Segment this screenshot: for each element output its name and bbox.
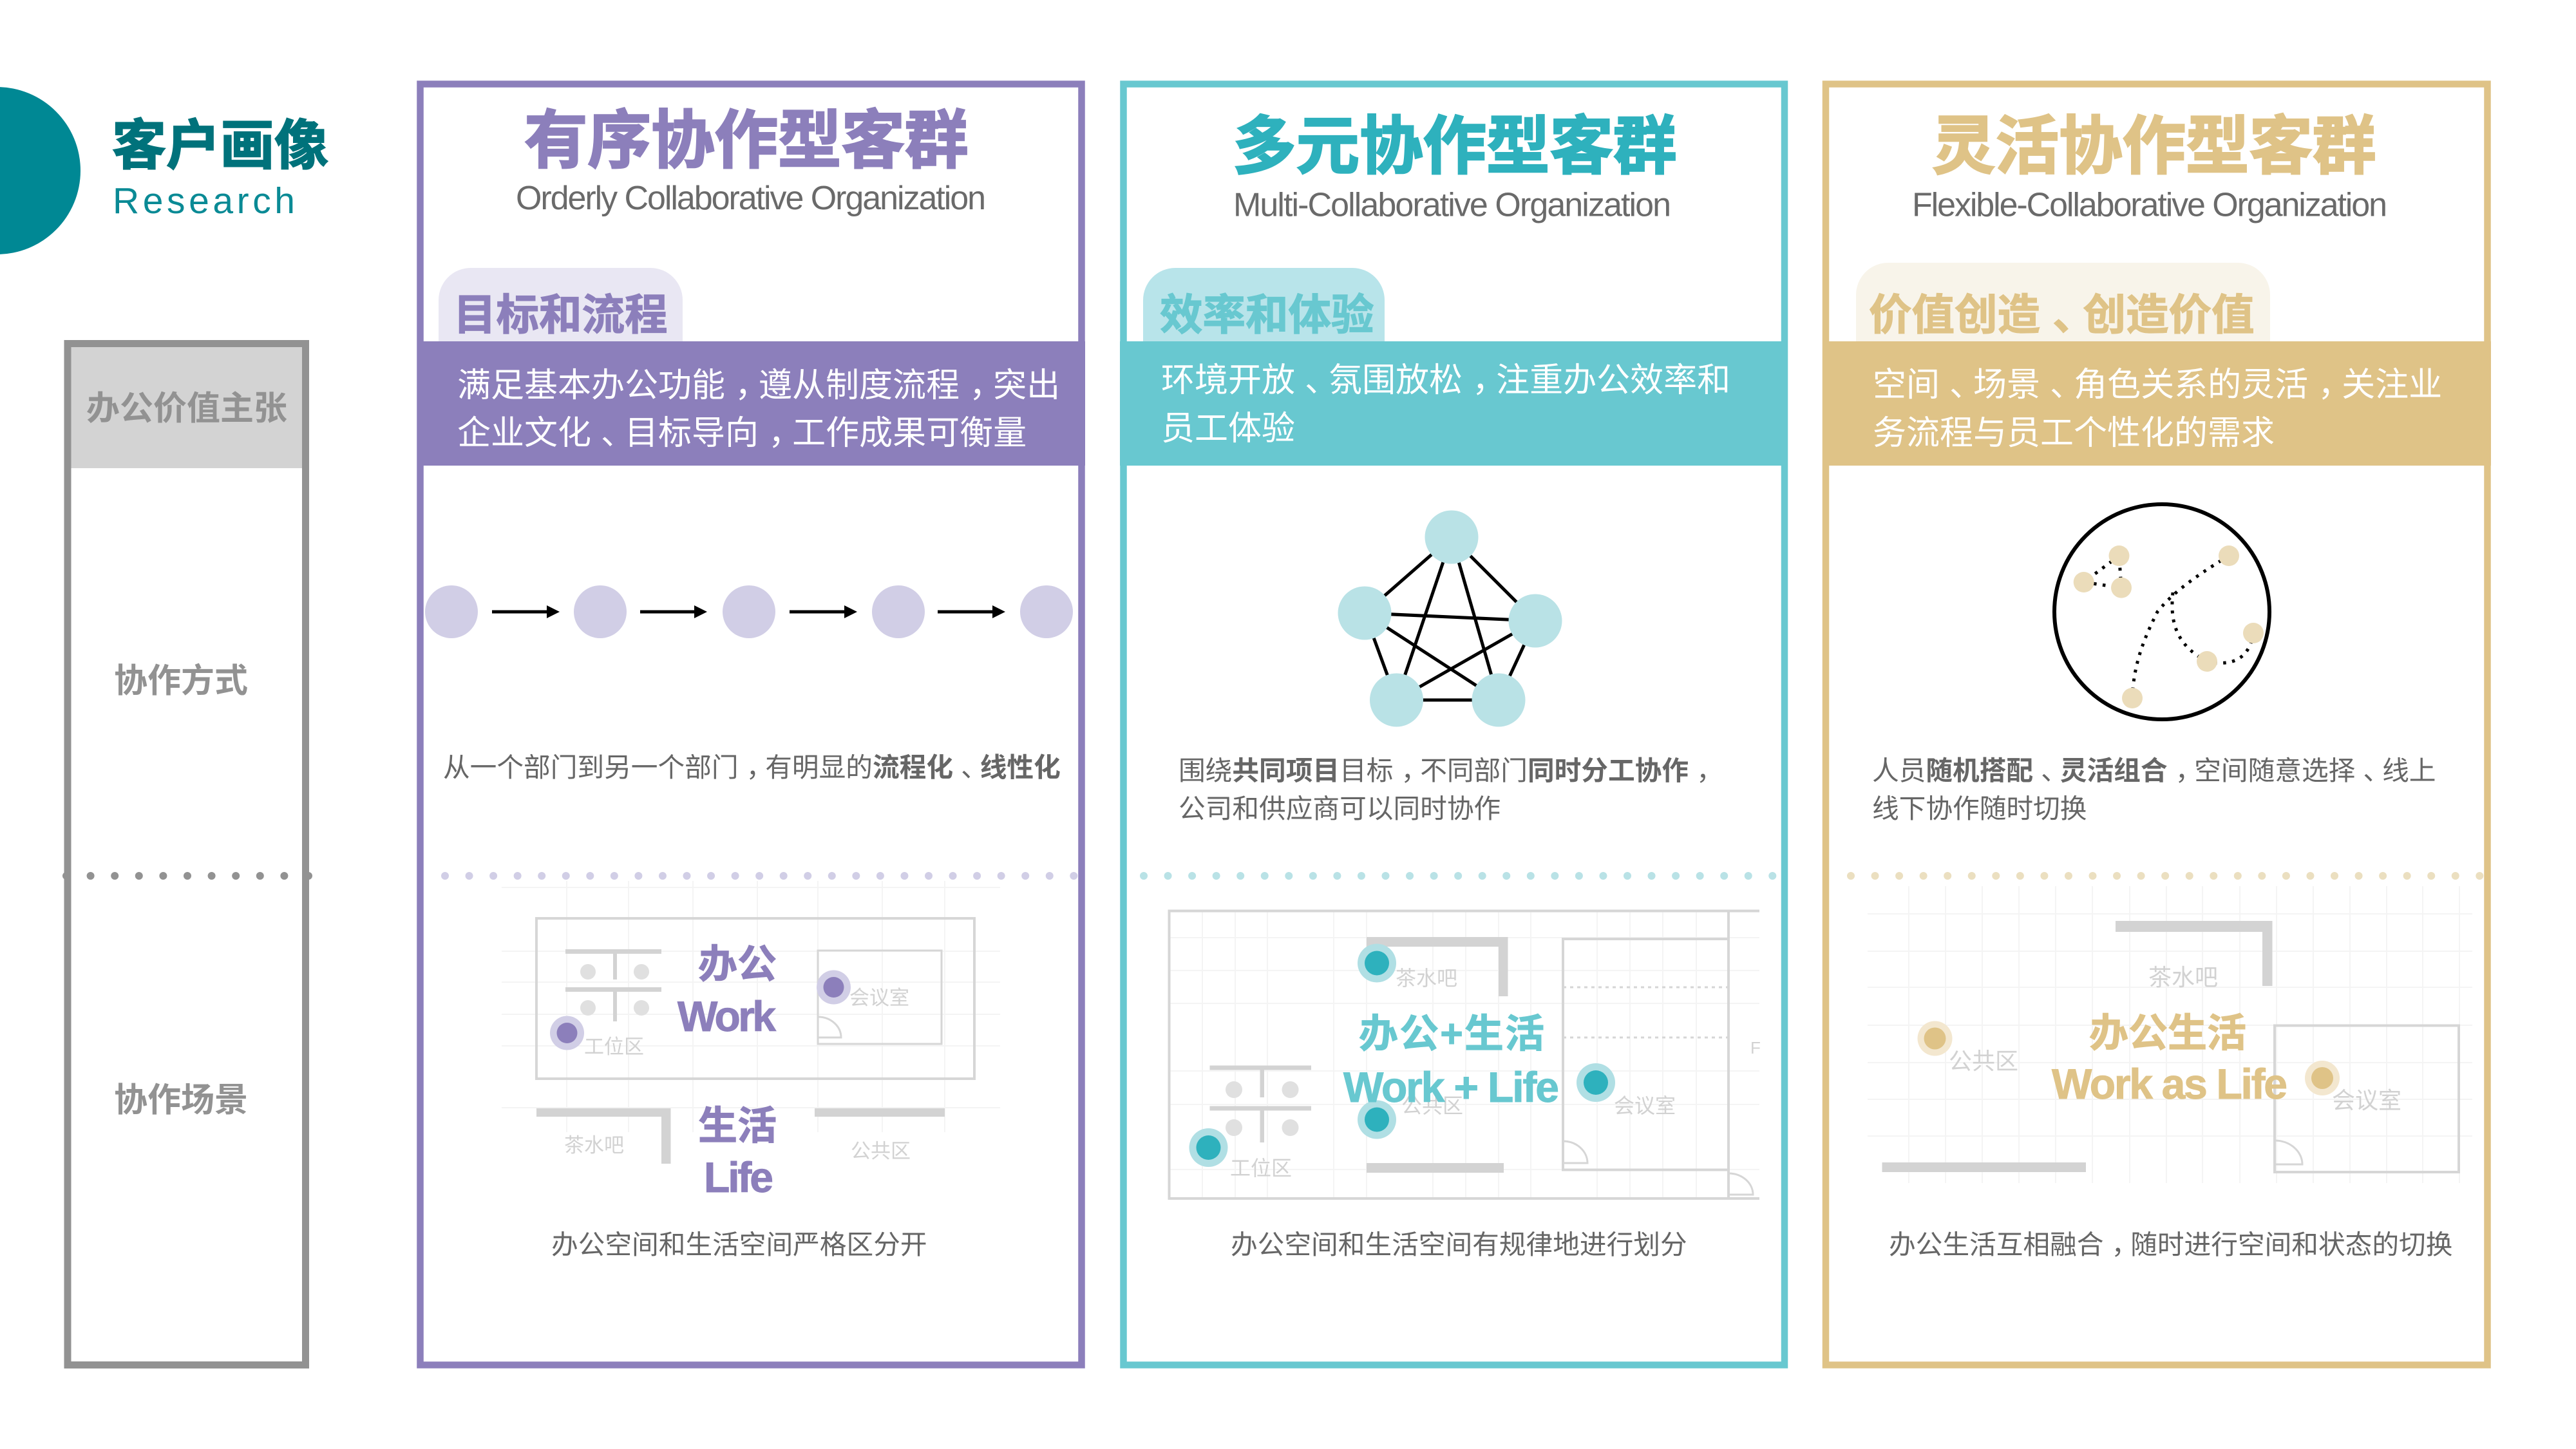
floor plan: separated work and life: 生活 [698,1104,777,1148]
collaboration description [1872,755,2436,824]
value statement band: 满足基本办公功能 ，遵从制度流程 ，突出 [457,367,1060,404]
floor plan: work plus life: 茶水吧 [1396,967,1457,990]
scene description: 办公空间和生活空间有规律地进行划分 [1231,1229,1687,1260]
page title [112,115,328,222]
panel title: 多元协作型客群 [1233,111,1677,182]
floor plan: separated work and life: 会议室 [849,987,909,1009]
floor plan: work as life: 办公生活 [2089,1011,2246,1055]
floor plan: work plus life: 工位区 [1230,1157,1292,1180]
collaboration description: 人员随机搭配 、灵活组合 ，空间随意选择 、线上 [1872,755,2436,786]
tab: efficiency and experience [1143,268,1385,341]
floor plan: separated work and life: 办公 [698,942,777,986]
floor plan: work plus life: 办公+生活 [1359,1012,1544,1056]
floor plan: separated work and life: 公共区 [851,1140,911,1162]
diagram: fully connected network [1338,510,1562,726]
floor plan: work as life [1868,886,2472,1183]
floor plan: separated work and life: 茶水吧 [564,1134,624,1157]
label: office value: 办公价值主张 [86,390,287,428]
floor plan: work plus life: 公共区 [1401,1094,1463,1117]
tab: goals and process [439,268,683,341]
scene description: 办公空间和生活空间严格区分开 [551,1229,927,1260]
panel subtitle: Flexible-Collaborative Organization [1912,187,2387,224]
panel: row labels [66,344,310,1365]
floor plan: work as life: 茶水吧 [2148,964,2218,990]
value statement band [1120,341,1788,466]
panel: orderly collaborative [417,84,1085,1365]
page title: 客户画像 [112,115,328,176]
label: collaboration mode: 协作方式 [114,663,248,700]
floor plan: separated work and life [502,881,1000,1201]
value statement band [417,341,1085,466]
diagram: random cluster in circle [2054,504,2269,719]
panel frame [420,84,1082,1365]
label: collaboration scene: 协作场景 [114,1082,248,1119]
floor plan: work as life: 公共区 [1949,1048,2018,1074]
tab: efficiency and experience: 效率和体验 [1160,292,1374,339]
row label heading block [71,347,302,468]
diagram: linear flow [425,585,1073,638]
floor plan: work plus life [1170,911,1761,1198]
floor plan: work as life: 会议室 [2332,1087,2401,1113]
floor plan: work as life: Work as Life [2052,1060,2287,1108]
panel frame [1826,84,2487,1365]
decorative teal half circle [0,87,80,254]
row label frame [68,344,305,1365]
panel frame [1123,84,1785,1365]
tab: value creation [1856,263,2270,341]
page title: Research [113,180,295,222]
value statement band: 空间 、场景 、角色关系的灵活 ，关注业 [1873,366,2442,404]
scene description: 办公生活互相融合 ，随时进行空间和状态的切换 [1889,1229,2452,1260]
collaboration description: 从一个部门到另一个部门 ，有明显的流程化 、线性化 [443,752,1061,782]
collaboration description: 公司和供应商可以同时协作 [1179,793,1501,824]
value statement band: 务流程与员工个性化的需求 [1873,415,2275,452]
panel subtitle: Multi-Collaborative Organization [1233,187,1671,224]
value statement band: 企业文化 、目标导向 ，工作成果可衡量 [457,415,1027,452]
floor plan: work plus life: 会议室 [1614,1094,1676,1117]
panel title: 灵活协作型客群 [1932,111,2376,182]
panel: flexible collaborative [1823,84,2491,1365]
collaboration description: 围绕共同项目目标 ，不同部门同时分工协作 ， [1179,755,1723,786]
collaboration description [1179,755,1723,824]
floor plan: separated work and life: 工位区 [584,1036,644,1058]
value statement band: 员工体验 [1161,410,1295,448]
panel title: 有序协作型客群 [524,105,969,176]
floor plan: separated work and life: Life [704,1153,773,1201]
floor plan: separated work and life: Work [677,992,776,1040]
tab: goals and process: 目标和流程 [453,292,667,339]
tab: value creation: 价值创造 、创造价值 [1869,292,2254,339]
value statement band [1823,341,2491,466]
panel: multi collaborative [1120,84,1788,1365]
floor plan: work plus life: F [1750,1038,1761,1057]
value statement band: 环境开放 、氛围放松 ，注重办公效率和 [1161,362,1730,399]
panel subtitle: Orderly Collaborative Organization [516,180,986,217]
floor plan: work plus life: Work + Life [1343,1063,1559,1111]
collaboration description: 线下协作随时切换 [1872,793,2087,824]
